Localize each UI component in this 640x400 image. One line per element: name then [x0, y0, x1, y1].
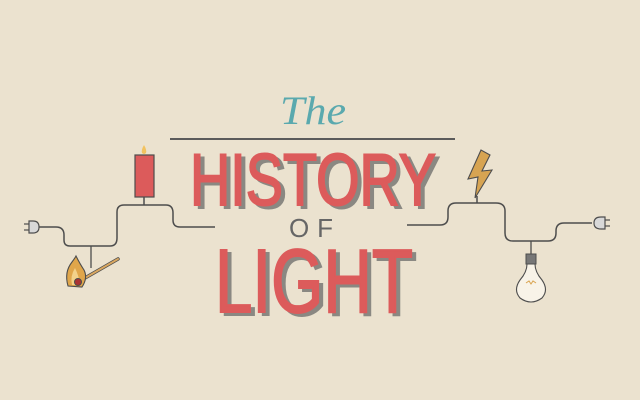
title: HISTORY: HISTORY — [190, 140, 436, 221]
icon: lightning bolt — [468, 150, 492, 203]
title: LIGHT: LIGHT — [215, 232, 413, 332]
title: OF: OF — [289, 213, 333, 243]
title: The: The — [280, 88, 346, 133]
wire: left — [38, 205, 215, 246]
divider line — [170, 138, 455, 140]
icon: match — [67, 246, 118, 287]
icon: light bulb — [516, 241, 546, 302]
icon: right plug — [594, 217, 610, 229]
title: LIGHT: LIGHT — [219, 235, 417, 335]
icon: left plug — [24, 221, 39, 233]
title: HISTORY: HISTORY — [194, 143, 440, 224]
wire: right — [407, 203, 592, 241]
icon: candle — [135, 145, 154, 205]
